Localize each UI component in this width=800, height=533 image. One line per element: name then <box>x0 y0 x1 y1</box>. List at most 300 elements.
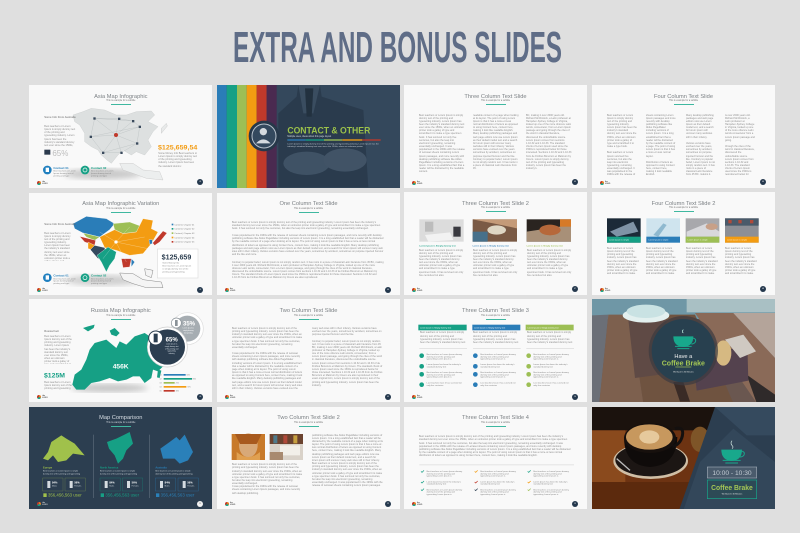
badge circle: We Back In 30 Minutes <box>673 371 694 374</box>
heading: Two Column Text Slide 2 <box>277 415 340 421</box>
bar chart: 60% <box>187 375 191 377</box>
page badge: 13 <box>574 503 576 505</box>
legend: Content | Chapter 01 <box>175 223 195 226</box>
panel: Asia map infographic variation <box>29 193 212 295</box>
column 1 text: Best teachers or Lorem Ipsum is simply dummy text of the printing and typesetting industry. Lorem Ipsum has been the industry's standard dummy text ever since the 1500s, when an unknown printer took a galley of type and scrambled it to make a type specimen book. It has survived not only five centuries but also. <box>419 248 463 277</box>
checklist text: dummy text of the printing and <box>480 490 509 493</box>
logo: the <box>42 288 45 290</box>
accent rule <box>111 318 131 320</box>
bullet text: Best teachers or Lorem Ipsum dummy <box>427 371 463 374</box>
checklist text: Lorem Ipsum has been the industry's <box>427 480 461 483</box>
tile 2 <box>646 218 680 243</box>
checklist text: Best teachers or Lorem Ipsum dummy <box>480 470 517 473</box>
coloured Asia map <box>73 216 167 272</box>
time box: 10:00 - 10:30 <box>712 470 752 477</box>
column 1 text <box>607 114 637 175</box>
stat bubble 65 percent: 65% <box>166 338 179 344</box>
right column text: many web sites still in their infancy. Various versions have evolved over the years, sometimes by accident, sometimes on purpose injected humour and the like. <box>312 327 382 336</box>
left text block heading: Some Info From Australia <box>44 116 76 119</box>
left column text: Best teachers or Lorem Ipsum is simply dummy text of the printing and typesetting industry. Lorem Ipsum has been the industry's standard dummy text ever since the 1500s, when an unknown printer took a galley of type and scrambled it to make a type specimen book. It has survived not only five centuries, but also the leap into electronic typesetting, remaining essentially unchanged. <box>232 463 302 485</box>
accent rule <box>111 211 131 214</box>
subtitle: This is example for a subtitle <box>481 207 510 209</box>
panel: Russia map infographic <box>29 299 212 402</box>
bullet text: typesetting Lorem Ipsum is <box>427 376 452 379</box>
page badge <box>572 286 578 292</box>
heading: Four Column Text Slide 2 <box>652 201 715 207</box>
checklist text: typesetting Lorem Ipsum is <box>533 474 558 477</box>
Australia column <box>156 434 199 497</box>
logo: LOGO <box>42 182 48 184</box>
logo <box>37 394 48 399</box>
page badge: 07 <box>574 288 576 290</box>
North America column <box>100 432 143 497</box>
bullet text: Lost teachers have it has survived not <box>480 382 516 385</box>
accent rule <box>111 425 131 428</box>
map connector lines <box>100 227 148 262</box>
heading: Asia Map Infographic <box>94 94 148 100</box>
stat bubble 65 percent: of the printing and <box>165 348 179 351</box>
photo 1 <box>419 219 464 242</box>
Europe column: dummy text of the printing and typesetting <box>43 472 80 475</box>
logo <box>37 502 48 506</box>
cover heading: CONTACT & OTHER <box>287 126 371 136</box>
map and stats graphic <box>43 108 198 180</box>
checklist text: typesetting Lorem Ipsum is <box>427 474 452 477</box>
bullet text: Lost teachers have it has survived not <box>533 382 569 385</box>
map shadow <box>67 275 140 285</box>
column 2 text: Best teachers or Lorem Ipsum is simply dummy text of the printing and typesetting industry. Lorem Ipsum has been the industry's standard dummy text ever since the 1500s, when an unknown printer took a galley of type and scrambled it to make a type specimen book. It has survived not only five centuries but also. <box>473 248 517 277</box>
checklist text: typesetting Lorem Ipsum is <box>533 493 558 496</box>
page badge: 10 <box>574 396 576 398</box>
contact 01: Best teachers or Lorem <box>54 277 76 280</box>
checklist text: typesetting Lorem Ipsum is <box>480 474 505 477</box>
icon: coffee cup <box>721 440 744 463</box>
logo: the <box>230 395 233 397</box>
bullet text: Best teachers or Lorem Ipsum dummy <box>480 371 517 374</box>
heading: Three Column Text Slide 4 <box>462 415 529 421</box>
checklist text: Lorem Ipsum has been the industry's <box>480 480 515 483</box>
tile 1: Lorem Ipsum is simple <box>609 240 630 242</box>
photo 1 <box>232 433 265 460</box>
North America column: Males <box>110 485 115 487</box>
bullet text <box>427 353 570 387</box>
logo: the <box>605 288 608 290</box>
column headers: Lorem Ipsum is Simply dummy text <box>527 327 559 330</box>
checklist text: dummy text of the printing and <box>427 472 456 475</box>
logo <box>600 180 610 185</box>
panel: three column text slide 2 <box>404 192 587 294</box>
fact heading: Russia Fact <box>44 330 59 333</box>
headers, dividers and bullets <box>418 324 574 387</box>
logo: the <box>417 502 420 504</box>
map value: 456K <box>113 364 129 371</box>
bullet text: Best teachers or Lorem Ipsum dummy <box>533 353 570 356</box>
right column text: publishing software like Aldus PageMaker including versions of Lorem Ipsum. It is a long established fact that a reader will be distracted by the readable content of a page when looking at its layout. The point of using Lorem Ipsum is that it has a more-or-less normal distribution of letters as opposed to using Content here, content here, making it look like readable English. Many desktop publishing packages and web page editors now use Lorem Ipsum as their default model text, and a search for lorem ipsum will uncover many web sites still in their infancy. <box>312 434 383 462</box>
accent rule <box>486 210 506 213</box>
icon: phone contact <box>249 121 279 151</box>
column headings: Lorem Ipsum is Simply dummy text <box>527 245 563 248</box>
Russia map and stats <box>44 312 204 393</box>
bullet text: Best teachers or Lorem Ipsum dummy <box>480 353 517 356</box>
page badge <box>197 179 203 185</box>
page badge <box>760 286 766 292</box>
checklist text: typesetting Lorem Ipsum is <box>427 493 452 496</box>
Australia column: Best teachers or Lorem Ipsum is simple <box>156 469 192 472</box>
bar chart: 03 <box>160 383 162 385</box>
stat bubble 65 percent: simply dummy text <box>165 345 179 348</box>
checklist text: standard dummy text <box>533 482 553 485</box>
heading: Three Column Text Slide <box>464 94 527 100</box>
coffee brake box <box>707 480 757 498</box>
right column text: Best teachers or Lorem Ipsum is simply dummy text of the printing and typesetting industry. Lorem Ipsum has been the industry's standard dummy text ever since the 1500s, when an unknown printer took a galley of type and scrambled it to make a type specimen book. It has survived not only five centuries, but also the leap into electronic typesetting, remaining essentially unchanged. It was popularised in the 1960s with the release of Letraset sheets containing Lorem Ipsum passages. <box>312 462 383 487</box>
cover subtitle: Multiple uses, ideas about this page layout <box>287 135 332 138</box>
badge circle: Have a <box>674 354 693 360</box>
photo and badge <box>592 299 775 402</box>
checklist text: Best teachers or Lorem Ipsum dummy <box>533 470 570 473</box>
bar chart <box>160 374 197 393</box>
money box: is simply dummy text of the <box>163 267 189 270</box>
panel: Asia map infographic <box>29 85 212 188</box>
column 2 text: sheets containing Lorem Ipsum passages and more recently with desktop publishing software like Aldus PageMaker including versions of Lorem Ipsum. It is a long established fact that a reader will be distracted by the readable content of a page. The point of using Lorem Ipsum is that it has a more-or-less normal layout. <box>646 114 676 158</box>
North America column: 56% <box>132 480 138 484</box>
panel: three column text slide 3 <box>404 299 587 402</box>
panel: two column text slide 2 <box>217 407 400 509</box>
logo <box>600 288 610 292</box>
contact 02: Best teachers or Lorem <box>91 170 114 173</box>
page badge: 02 <box>199 289 201 291</box>
page badge <box>385 501 391 507</box>
subtitle: This is example for a subtitle <box>294 422 323 424</box>
paper cup <box>623 305 669 378</box>
bullet text: dummy text of the printing and <box>480 356 509 359</box>
page badge: 12 <box>387 503 389 505</box>
photo 2 <box>270 434 303 460</box>
money box <box>158 249 198 278</box>
column 4 text: Best teachers or Lorem Ipsum dummy text of the printing and typesetting industry. Lorem Ipsum has been the industry's standard dummy text ever since the 1500s, when an unknown printer took a galley of type and scrambled it to make. <box>725 247 757 275</box>
logo: the <box>230 502 233 504</box>
heading: Russia Map Infographic <box>91 308 151 314</box>
contact 01: printing and type <box>54 174 70 177</box>
contact 02: Best teachers or Lorem <box>91 277 114 280</box>
badge circle: Coffee Brake <box>662 361 705 368</box>
bullet text: standard dummy text <box>427 366 447 369</box>
panel: map comparison dark slide <box>29 407 212 509</box>
Australia column: Males <box>165 485 170 487</box>
contact 01 <box>43 166 76 177</box>
heading: One Column Text Slide <box>279 201 338 207</box>
bar chart: 25% <box>176 383 180 385</box>
cover body text: industry's standard dummy text ever since the 1500s, when an unknown printer <box>287 145 363 148</box>
column 1 text: Best teachers or Lorem Ipsum is simply dummy text of the printing and typesetting industry. Lorem Ipsum has been the industry's standard dummy text ever since the 1500s, when an unknown printer took a galley of type and scrambled it to make a type specimen book. It has survived not only five centuries, but also the leap into electronic typesetting, remaining essentially unchanged. It was popularised in the 1960s with the release of Letraset sheets containing Lorem Ipsum passages, and more recently with desktop publishing software like Aldus PageMaker including versions of Lorem Ipsum. It is a long established fact that a reader will be distracted by the readable content. <box>419 114 465 173</box>
left column text <box>232 327 302 390</box>
stat bubble 35 percent <box>172 313 204 345</box>
page badge <box>385 287 391 293</box>
column headings: Lorem Ipsum is Simply dummy text <box>473 245 509 248</box>
contact 02: printing and type <box>91 174 108 177</box>
North America column: North America <box>100 465 119 469</box>
intro paragraph: Best teachers or Lorem Ipsum is simply dummy text of the printing and typesetting industry. Lorem Ipsum has been the industry's standard dummy text ever since the 1500s, when an unknown printer took a galley of type and scrambled it to make a type specimen book. It has survived not only five centuries, but also the leap into electronic typesetting, remaining essentially unchanged. It was popularised in the 1960s with the release of Letraset sheets containing Lorem Ipsum passages, and more recently with desktop publishing software like Aldus PageMaker including versions of Lorem Ipsum. It is a long established fact that a reader will be distracted by the readable content of a page when looking at its layout. The point of using Lorem Ipsum is that it has a more-or-less normal distribution of letters as opposed to using Content here, content here, making it look like readable English. <box>419 435 570 457</box>
Europe column: 56% <box>75 480 81 484</box>
page badge <box>197 394 203 400</box>
logo: LOGO <box>42 397 48 399</box>
page badge: 01 <box>199 181 201 183</box>
logo: the <box>605 180 608 182</box>
cover body text <box>287 142 380 148</box>
column 3 text: BC, making it over 2000 years old. Richard McClintock, a Latin professor at Hampden-Sydney College in Virginia, looked up one of the more obscure Latin words, consectetur, from a Lorem Ipsum passage and going through the cites of the word in classical literature, discovered the undoubtable source. Lorem Ipsum comes from sections 1.10.32 and 1.10.33. The standard chunk of Lorem Ipsum used since the 1500s is reproduced below for those interested. Sections 1.10.32 and 1.10.33 from de Finibus Bonorum et Malorum by Cicero. Lorem Ipsum is simply dummy text of the printing and typesetting industry. Lorem Ipsum has been the industry's. <box>526 114 571 170</box>
logo <box>412 180 422 185</box>
thumbnails and column headings <box>419 219 571 248</box>
accent rule <box>298 425 318 428</box>
bar chart: 01 <box>160 375 162 377</box>
heading: Three Column Text Slide 2 <box>462 201 529 207</box>
photo and stripes <box>217 85 381 188</box>
bullet text: typesetting Lorem Ipsum is <box>480 376 505 379</box>
contact 01: Ipsum dummy text of <box>54 172 74 175</box>
coffee photo <box>592 407 775 510</box>
page badge: 05 <box>199 396 201 398</box>
subtitle: This is example for a subtitle <box>669 100 698 102</box>
column 1 text: Best teachers or Lorem Ipsum is simply dummy text of the printing and typesetting industry. Lorem Ipsum has been the industry's standard dummy text ever since the 1500s, when an unknown printer took a galley of type and scrambled it to make a type book. <box>607 114 637 148</box>
bar chart: 30% <box>176 391 180 393</box>
subtitle: This is example for a subtitle <box>481 422 510 424</box>
Russia map <box>73 325 163 390</box>
accent rule <box>486 318 506 320</box>
left text block heading: Some Info From Australia <box>44 223 76 226</box>
contact 02: Contact 02 <box>91 166 107 170</box>
page badge: 04 <box>762 181 764 183</box>
tile 4: Lorem Ipsum is simple <box>727 240 748 242</box>
logo: LOGO <box>42 290 48 292</box>
stat bubble 65 percent: industry <box>169 352 175 355</box>
bullet text: dummy text of the printing and <box>533 356 562 359</box>
panel: two column text slide <box>217 299 400 402</box>
stat bubble 65 percent <box>148 327 188 367</box>
paragraph 3: Contrary to popular belief, Lorem Ipsum is not simply random text. It has roots in a piece of classical Latin literature from 45 BC, making it over 2000 years old. Richard McClintock, a Latin professor at Hampden-Sydney College in Virginia, looked up one of the more obscure Latin words, consectetur, from a Lorem Ipsum passage, and going through the cites of the word in classical literature, discovered the undoubtable source. Lorem Ipsum comes from sections 1.10.32 and 1.10.33 of de Finibus Bonorum et Malorum by Cicero. The standard chunk of Lorem Ipsum used since the 1500s is reproduced below for those interested. Sections 1.10.32 and 1.10.33 from de Finibus Bonorum et Malorum by Cicero are also reproduced. <box>232 261 384 279</box>
checklist <box>420 464 574 496</box>
subtitle: This is example for a subtitle <box>106 315 135 317</box>
left column text: It was popularised in the 1960s with the release of Letraset sheets containing Lorem Ipsum passages, and more recently with desktop publishing. <box>232 485 300 495</box>
page badge: 11 <box>199 503 201 505</box>
paragraph 2: It was popularised in the 1960s with the release of Letraset sheets containing Lorem Ipsum passages, and more recently with desktop publishing software like Aldus PageMaker including versions of Lorem Ipsum. It is a long established fact that a reader will be distracted by the readable content of a page when looking at its layout. The point of using Lorem Ipsum is that it has a more-or-less normal distribution of letters as opposed to using Content here, content here, making it look like readable English. Many desktop publishing packages and web page editors now use Lorem Ipsum as their default model text, and a search for lorem ipsum will uncover many web sites still in their infancy. Various versions have evolved over the years, sometimes by accident, sometimes on purpose injected humour and the like and more. <box>232 234 383 256</box>
column headings: Lorem Ipsum is Simply dummy text <box>419 245 456 248</box>
Europe column: Females <box>75 485 82 487</box>
column 3 text: Best teachers or Lorem Ipsum is simply dummy text of the printing and typesetting industry. Lorem Ipsum has been the industry's standard dummy text ever since the 1500s, when an unknown printer took a galley of type and scrambled it to make a type specimen book. It has survived not only five centuries but also. <box>527 248 571 277</box>
bullet text: Lorem Ipsum has been the industry's <box>427 363 461 366</box>
contact 01: Contact 01 <box>54 273 69 277</box>
logo: the <box>417 180 420 182</box>
page badge: 09 <box>387 396 389 398</box>
Australia column: 84% <box>165 480 171 484</box>
checklist text: Lorem Ipsum has been the industry's <box>533 480 568 483</box>
heading: Asia Map Infographic Variation <box>82 201 159 207</box>
contact 01: Ipsum dummy text of <box>54 279 74 282</box>
subtitle: This is example for a subtitle <box>294 315 323 317</box>
panel: coffee break photo slide <box>592 299 775 402</box>
map centre marker <box>115 240 118 243</box>
column headings <box>419 245 563 248</box>
page badge <box>197 501 203 507</box>
bullet text: only five centuries <box>533 384 550 387</box>
dividers <box>419 348 574 349</box>
right column text: Contrary to popular belief, Lorem Ipsum is not simply random text. It has roots in a piece of classical Latin literature from 45 BC, making it over 2000 years old. Richard McClintock, a Latin professor at Hampden-Sydney College in Virginia, looked up one of the more obscure Latin words, consectetur, from a Lorem Ipsum passage, and going through the cites of the word in classical literature, discovered the undoubtable source. Lorem Ipsum comes from sections 1.10.32 and 1.10.33 of de Finibus Bonorum et Malorum by Cicero. The standard chunk of Lorem Ipsum used since the 1500s is reproduced below for those interested. Sections 1.10.32 and 1.10.33 from de Finibus Bonorum et Malorum by Cicero are also reproduced in their exact original form, Lorem Ipsum is simply dummy text of the printing and typesetting industry. Lorem Ipsum has been the industry. <box>312 340 382 387</box>
bullet text: only five centuries <box>480 384 497 387</box>
subtitle: This is example for a subtitle <box>106 100 135 102</box>
legend: Content | Chapter 05 <box>175 240 195 243</box>
cover body text: Lorem Ipsum is simply dummy text of the printing and typesetting industry, Lorem Ipsum has the <box>287 142 380 145</box>
bullet text: typesetting Lorem Ipsum is <box>427 358 452 361</box>
tile 1 <box>607 218 641 243</box>
photo 3 <box>527 219 571 242</box>
column headers: Lorem Ipsum is Simply dummy text <box>474 327 506 330</box>
users icon and 65 percent: 65% <box>53 149 69 158</box>
logo <box>412 394 422 399</box>
Australia column: 356,456,563 user <box>161 492 195 497</box>
logo: the <box>230 288 233 290</box>
bullet text: Best teachers or Lorem Ipsum dummy <box>427 353 463 356</box>
logo: LOGO <box>605 290 610 292</box>
Australia column: 56% <box>188 480 194 484</box>
panel: four column text slide 2 <box>592 192 775 294</box>
logo: LOGO <box>417 397 422 399</box>
logo: the <box>417 395 420 397</box>
accent rule <box>298 211 318 214</box>
page badge <box>572 501 578 507</box>
stat bubble 35 percent: simply dummy <box>183 330 194 332</box>
time box <box>707 467 757 478</box>
badge circle <box>649 316 718 386</box>
checklist text: standard dummy text <box>427 482 447 485</box>
panel: three column text slide <box>404 85 587 188</box>
page badge <box>760 179 766 185</box>
colour stripes <box>217 85 277 188</box>
stat bubble 65 percent: Lorem Ipsum is <box>166 344 178 346</box>
bullet text: standard dummy text <box>533 366 553 369</box>
subtitle: This is example for a subtitle <box>106 208 135 210</box>
logo <box>225 502 236 506</box>
checklist text: dummy text of the printing and <box>533 472 562 475</box>
Europe column: Best teachers or Lorem Ipsum is simple <box>43 469 79 472</box>
subtitle: This is example for a subtitle <box>106 422 135 424</box>
coffee brake box: Coffee Brake <box>711 483 753 492</box>
photo and overlay <box>592 407 775 509</box>
subtitle: This is example for a subtitle <box>481 315 510 317</box>
wooden table photo <box>592 299 775 403</box>
logo: LOGO <box>417 182 422 184</box>
checklist text: Best teachers or Lorem Ipsum dummy <box>427 488 463 491</box>
map shadow <box>65 169 142 179</box>
logo <box>225 394 236 399</box>
checklist text: typesetting Lorem Ipsum is <box>480 493 505 496</box>
paragraph 1: Best teachers or Lorem Ipsum is simply dummy text of the printing and typesetting industry. Lorem Ipsum has been the industry's standard dummy text ever since the 1500s, when an unknown printer took a galley of type and scrambled it to make a type specimen book. It has survived not only five centuries, but also the leap into electronic typesetting, remaining essentially unchanged. <box>232 221 380 230</box>
map shadow <box>72 384 148 392</box>
photos <box>232 433 303 460</box>
column 3 text: Many desktop publishing packages and web page editors now use Lorem Ipsum as their default model text, and a search for lorem ipsum will uncover many websites still in their infancy. <box>686 114 714 139</box>
checklist text: Best teachers or Lorem Ipsum dummy <box>427 470 463 473</box>
logo <box>37 288 48 292</box>
bullet text: Best teachers or Lorem Ipsum dummy <box>533 371 570 374</box>
logo: LOGO <box>230 397 235 399</box>
subtitle: This is example for a subtitle <box>481 100 510 102</box>
Europe column <box>43 435 86 497</box>
price figure: $125,659,54 <box>158 145 198 152</box>
legend: Content | Chapter 03 <box>175 232 195 235</box>
subtitle: This is example for a subtitle <box>294 208 323 210</box>
North America column: dummy text of the printing and typesetting <box>100 472 137 475</box>
logo: the <box>417 288 420 290</box>
Australia column: Australia <box>156 465 168 469</box>
heading: Two Column Text Slide <box>280 308 337 314</box>
bullet text: Lost teachers have it has survived not <box>427 382 462 385</box>
contact 02: printing and type <box>91 282 108 285</box>
bullet text: only five centuries <box>427 384 443 387</box>
pastry box <box>693 335 756 391</box>
checklist text: Best teachers or Lorem Ipsum dummy <box>533 488 570 491</box>
contact 01: Best teachers or Lorem <box>54 170 76 173</box>
bar chart: 70% <box>188 387 191 389</box>
divider <box>419 464 574 465</box>
column 1 text: Best teachers or Lorem Ipsum dummy text of the printing and typesetting industry. Lorem Ipsum has been the industry's standard dummy text ever since the 1500s, when an unknown printer took a galley of type and scrambled it to make. <box>607 247 639 275</box>
Australia column: dummy text of the printing and typesetting <box>156 472 193 475</box>
panel: three column text slide 4 <box>404 407 587 509</box>
Europe column: Europe <box>43 465 53 469</box>
left column text <box>232 463 302 495</box>
contact 02: Ipsum dummy text of <box>91 279 112 282</box>
page badge <box>197 287 203 293</box>
bar chart: 02 <box>160 379 162 381</box>
bar chart: 04 <box>160 387 162 389</box>
column 2 text: readable content of a page when looking at its layout. The point of using Lorem Ipsum is that it has a more-or-less normal distribution of letters as opposed to using Content here, content here, making it look like readable English. Many desktop publishing packages and web page editors now use Lorem Ipsum as their default model text and a search for lorem ipsum will uncover many websites still in their infancy. Various versions have evolved over the years sometimes by accident, sometimes on purpose injected humour and the like. Contrary to popular belief, Lorem Ipsum is not simply random text. It has roots in a piece of classical Latin literature from 45. <box>473 114 518 170</box>
page badge: 08 <box>762 288 764 290</box>
bullet text: dummy text of the printing and <box>427 374 456 377</box>
money box: Some Money Info <box>163 262 180 264</box>
checklist text: Best teachers or Lorem Ipsum dummy <box>480 488 517 491</box>
accent rule <box>111 103 131 106</box>
accent rule <box>486 103 506 106</box>
money box: printing and typesetting <box>163 270 186 273</box>
legend: Content | Chapter 02 <box>175 227 195 230</box>
island outlines <box>120 268 163 287</box>
map and legend graphic <box>43 216 198 288</box>
money box: Best teachers or Lorem Ipsum <box>163 264 192 267</box>
suit photo <box>277 85 400 188</box>
contact 01: Contact 01 <box>54 166 69 170</box>
panel: coffee brake timer slide <box>592 407 775 509</box>
checklist text: dummy text of the printing and <box>427 490 456 493</box>
North America column: Females <box>132 485 139 487</box>
Europe column: Males <box>52 485 57 487</box>
accent rule <box>674 103 694 106</box>
tile 2: Lorem Ipsum is simple <box>648 240 669 242</box>
checklist text <box>427 470 570 496</box>
logo: LOGO <box>230 290 235 292</box>
logo <box>225 288 236 292</box>
value figure: $125M <box>44 373 65 380</box>
bar chart: 05 <box>160 391 162 393</box>
Asia map <box>73 108 168 180</box>
North America column: 84% <box>110 480 116 484</box>
heading: Four Column Text Slide <box>654 94 713 100</box>
image tiles with coloured captions <box>607 218 759 243</box>
page badge: 06 <box>387 289 389 291</box>
check marks <box>421 470 531 490</box>
bullet text: dummy text of the printing and <box>533 374 562 377</box>
dark overlay <box>679 407 775 510</box>
photo 2 <box>473 219 517 242</box>
multicolour rule <box>287 139 381 141</box>
logo <box>412 502 422 506</box>
contact 01 <box>43 273 76 285</box>
North America column: Best teachers or Lorem Ipsum is simple <box>100 469 136 472</box>
